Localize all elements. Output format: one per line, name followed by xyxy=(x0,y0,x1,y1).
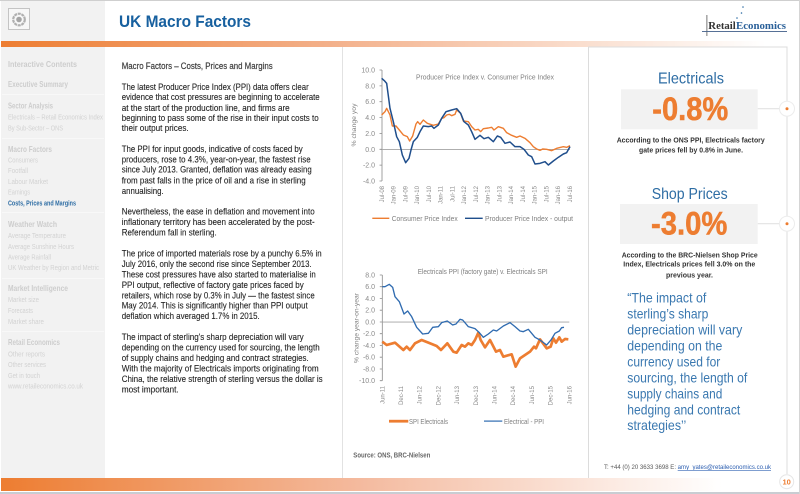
line chart: Electricals PPI v. Electricals SPI: Dec-11 xyxy=(399,385,405,405)
line chart: Producer Price Index v. Consumer Price Index: Jan-11 xyxy=(439,185,445,204)
page number: 10 xyxy=(783,478,791,486)
sidebar navigation: Market size xyxy=(8,297,39,304)
line chart: Electricals PPI v. Electricals SPI: Jun-16 xyxy=(567,385,573,404)
paragraph 1 xyxy=(122,82,320,133)
paragraph 3 xyxy=(122,207,315,238)
line chart: Electricals PPI v. Electricals SPI: Electrical - PPI xyxy=(504,419,544,426)
line chart: Electricals PPI v. Electricals SPI: Electricals PPI (factory gate) v. Electricals SPI xyxy=(418,269,548,276)
pull quote: hedging and contract xyxy=(627,401,740,417)
line chart: Electricals PPI v. Electricals SPI: Dec-13 xyxy=(474,385,480,405)
icon: settings target xyxy=(8,8,30,30)
sidebar navigation: Electricals – Retail Economics Index xyxy=(8,114,103,122)
paragraph 4: May 2014. This is significantly higher than PPI output xyxy=(122,301,308,311)
paragraph 4: deflation which averaged 1.7% in 2015. xyxy=(122,311,260,321)
stat: Shop Prices xyxy=(620,186,794,279)
paragraph 4: PPI output, reflective of factory gate prices faced by xyxy=(122,280,304,290)
paragraph 1: The latest Producer Price Index (PPI) data offers clear xyxy=(122,82,309,92)
line chart: Producer Price Index v. Consumer Price Index: 2.0 xyxy=(365,131,375,138)
pull quote: currency used for xyxy=(627,354,721,370)
stat: Electricals: -0.8% xyxy=(652,91,728,127)
line chart: Producer Price Index v. Consumer Price Index: Jan-12 xyxy=(462,185,468,204)
page number xyxy=(780,475,794,489)
pull quote xyxy=(627,290,747,433)
paragraph 2: producers, rose to 4.3%, year-on-year, the fastest rise xyxy=(122,154,311,164)
sidebar navigation: Get in touch xyxy=(8,373,40,380)
stat: Shop Prices: previous year. xyxy=(666,270,713,279)
line chart: Producer Price Index v. Consumer Price Index: Consumer Price Index xyxy=(392,216,458,223)
line chart: Producer Price Index v. Consumer Price Index: Jan-16 xyxy=(556,185,562,204)
stat: Electricals: Electricals xyxy=(658,70,724,88)
line chart: Producer Price Index v. Consumer Price Index: Jan-14 xyxy=(509,185,515,204)
line chart: Producer Price Index v. Consumer Price Index: 6.0 xyxy=(365,99,375,106)
pull quote: supply chains and xyxy=(627,385,722,401)
line chart: Electricals PPI v. Electricals SPI: % change year-on-year xyxy=(354,292,360,363)
sidebar navigation: Macro Factors xyxy=(8,144,52,154)
line chart: Electricals PPI v. Electricals SPI: Jun-13 xyxy=(455,385,461,404)
line chart: Producer Price Index v. Consumer Price Index: Jan-09 xyxy=(392,185,398,204)
line chart: Producer Price Index v. Consumer Price Index: Jul-10 xyxy=(427,185,433,202)
stat: Shop Prices: Shop Prices xyxy=(652,186,728,203)
line chart: Producer Price Index v. Consumer Price Index: % change yoy xyxy=(351,103,358,146)
line chart: Electricals PPI v. Electricals SPI: Jun-15 xyxy=(530,385,536,404)
contact details: T: +44 (0) 20 3633 3698 E: xyxy=(604,465,676,471)
paragraph 5: most important. xyxy=(122,384,179,394)
sidebar navigation: By Sub-Sector – ONS xyxy=(8,126,63,132)
paragraph 4: July 2016, only the second rise since September 2013. xyxy=(122,259,312,269)
paragraph 1: at the start of the production line, and firms are xyxy=(122,103,290,113)
line chart: Electricals PPI v. Electricals SPI: Dec-15 xyxy=(549,385,555,405)
bottom orange band xyxy=(1,478,776,491)
paragraph 5: The impact of sterling's sharp depreciation will vary xyxy=(122,332,304,342)
source note: Source: ONS, BRC-Nielsen xyxy=(353,453,430,460)
paragraph 4: retailers, which rose by 0.3% in July — the fastest since xyxy=(122,290,315,300)
line chart: Electricals PPI v. Electricals SPI: -8.0 xyxy=(363,366,375,374)
sidebar navigation: Consumers xyxy=(8,158,38,164)
line chart: Electricals PPI v. Electricals SPI: -4.0 xyxy=(363,343,375,350)
sidebar navigation: Retail Economics xyxy=(8,337,60,347)
line chart: Electricals PPI v. Electricals SPI: 0.0 xyxy=(365,320,375,326)
stat: Shop Prices: According to the BRC-Nielsen Shop Price xyxy=(622,250,758,259)
pull quote: sterling’s sharp xyxy=(627,306,708,322)
line chart: Electricals PPI v. Electricals SPI: 8.0 xyxy=(365,272,375,280)
line chart: Producer Price Index v. Consumer Price Index: Jul-08 xyxy=(380,185,386,202)
paragraph 1: their output prices. xyxy=(122,123,189,133)
line chart: Producer Price Index v. Consumer Price Index: Jan-15 xyxy=(533,185,539,204)
paragraph 4: The price of imported materials rose by a punchy 6.5% in xyxy=(122,249,322,259)
line chart: Electricals PPI v. Electricals SPI: Dec-14 xyxy=(511,385,517,405)
line chart: Producer Price Index v. Consumer Price Index: -4.0 xyxy=(363,178,375,186)
paragraph 3: Nevertheless, the ease in deflation and movement into xyxy=(122,207,315,217)
sidebar navigation: Average Sunshine Hours xyxy=(8,244,74,251)
sidebar navigation: Other reports xyxy=(8,352,45,358)
paragraph 2: The PPI for input goods, indicative of costs faced by xyxy=(122,144,303,154)
logo: Retail Economics: Retail xyxy=(708,21,736,32)
line chart: Electricals PPI v. Electricals SPI xyxy=(354,269,573,426)
sidebar navigation: Market Intelligence xyxy=(8,283,68,293)
section heading: Macro Factors – Costs, Prices and Margins xyxy=(122,61,273,71)
paragraph 3: Referendum fall in sterling. xyxy=(122,228,217,238)
sidebar navigation: Footfall xyxy=(8,168,28,175)
sidebar panel xyxy=(1,1,105,478)
line chart: Electricals PPI v. Electricals SPI: Dec-12 xyxy=(436,385,442,405)
pull quote: strategies’’ xyxy=(627,417,686,433)
title: UK Macro Factors xyxy=(119,12,251,31)
paragraph 2: from past falls in the price of oil and a rise in sterling xyxy=(122,176,306,186)
line chart: Producer Price Index v. Consumer Price Index: Producer Price Index v. Consumer Price Index xyxy=(416,74,554,81)
line chart: Producer Price Index v. Consumer Price Index: 10.0 xyxy=(361,68,375,74)
paragraph 5 xyxy=(122,332,323,394)
line chart: Producer Price Index v. Consumer Price Index: Jan-13 xyxy=(486,185,492,204)
line chart: Producer Price Index v. Consumer Price Index: Jul-13 xyxy=(498,185,504,202)
sidebar navigation: Weather Watch xyxy=(8,219,57,229)
line chart: Producer Price Index v. Consumer Price Index xyxy=(351,68,574,223)
line chart: Producer Price Index v. Consumer Price Index: Producer Price Index - output xyxy=(485,216,573,223)
line chart: Electricals PPI v. Electricals SPI: 2.0 xyxy=(365,308,375,315)
paragraph 3: inflationary territory has been accelerated by the post- xyxy=(122,217,315,227)
stat: Shop Prices: Index, Electricals prices fell 3.0% on the xyxy=(623,260,755,269)
pull quote: “The impact of xyxy=(627,290,706,306)
line chart: Producer Price Index v. Consumer Price Index: 4.0 xyxy=(365,115,375,122)
sidebar navigation: Costs, Prices and Margins xyxy=(8,200,76,208)
paragraph 5: depending on the currency used for sourcing, the length xyxy=(122,343,320,353)
logo: Retail Economics: Economics xyxy=(736,21,786,32)
line chart: Electricals PPI v. Electricals SPI: 6.0 xyxy=(365,284,375,291)
line chart: Electricals PPI v. Electricals SPI: -2.0 xyxy=(363,331,375,338)
line chart: Producer Price Index v. Consumer Price Index: Jul-11 xyxy=(450,185,456,202)
line chart: Producer Price Index v. Consumer Price Index: Jul-12 xyxy=(474,185,480,202)
panel: key figures xyxy=(588,47,794,478)
sidebar navigation: Sector Analysis xyxy=(8,100,53,110)
sidebar navigation xyxy=(2,59,104,390)
line chart: Producer Price Index v. Consumer Price Index: 8.0 xyxy=(365,83,375,90)
paragraph 5: With the majority of Electricals imports originating from xyxy=(122,364,319,374)
paragraph 4: These cost pressures have also started to materialise in xyxy=(122,270,316,280)
paragraph 2: since July 2013. Granted, deflation was already easing xyxy=(122,165,312,175)
sidebar navigation: Earnings xyxy=(8,190,30,196)
sidebar navigation: Other services xyxy=(8,362,46,369)
contact details xyxy=(604,465,772,471)
contact details: amy_yates@retaileconomics.co.uk xyxy=(678,465,772,471)
sidebar navigation: UK Weather by Region and Metric xyxy=(8,265,99,272)
stat: Shop Prices: -3.0% xyxy=(651,205,727,241)
pull quote: sourcing, the length of xyxy=(627,369,747,385)
line chart: Producer Price Index v. Consumer Price Index: Jul-09 xyxy=(404,185,410,202)
paragraph 4 xyxy=(122,249,322,321)
stat: Electricals: According to the ONS PPI, Electricals factory xyxy=(617,136,765,145)
line chart: Electricals PPI v. Electricals SPI: Jun-11 xyxy=(380,385,386,404)
sidebar navigation: Labour Market xyxy=(8,179,48,186)
sidebar navigation: Average Rainfall xyxy=(8,254,51,262)
paragraph 1: beginning to pass some of the rise in their input costs to xyxy=(122,113,319,123)
line chart: Electricals PPI v. Electricals SPI: -10.0 xyxy=(359,378,375,385)
line chart: Electricals PPI v. Electricals SPI: 4.0 xyxy=(365,296,375,303)
line chart: Producer Price Index v. Consumer Price Index: 0.0 xyxy=(365,147,375,154)
paragraph 1: evidence that cost pressures are beginning to accelerate xyxy=(122,92,320,102)
line chart: Producer Price Index v. Consumer Price Index: -2.0 xyxy=(363,163,375,170)
line chart: Electricals PPI v. Electricals SPI: -6.0 xyxy=(363,355,375,362)
line chart: Producer Price Index v. Consumer Price Index: Jan-10 xyxy=(415,185,421,204)
top orange band xyxy=(1,41,781,47)
sidebar navigation: Executive Summary xyxy=(8,79,68,89)
paragraph 2: annualising. xyxy=(122,186,164,196)
line chart: Electricals PPI v. Electricals SPI: SPI Electricals xyxy=(409,419,448,426)
body text column xyxy=(122,61,323,394)
paragraph 5: of supply chains and hedging and contract strategies. xyxy=(122,353,309,363)
line chart: Producer Price Index v. Consumer Price Index: Jul-15 xyxy=(544,185,550,202)
sidebar navigation: Interactive Contents xyxy=(8,59,77,69)
line chart: Producer Price Index v. Consumer Price Index: Jul-16 xyxy=(568,185,574,202)
sidebar navigation: Forecasts xyxy=(8,308,33,315)
pull quote: depending on the xyxy=(627,338,722,354)
line chart: Electricals PPI v. Electricals SPI: Jun-12 xyxy=(418,385,424,404)
line chart: Producer Price Index v. Consumer Price Index: Jul-14 xyxy=(521,185,527,202)
paragraph 5: China, the relative strength of sterling versus the dollar is xyxy=(122,374,323,384)
paragraph 2 xyxy=(122,144,312,196)
pull quote: depreciation will vary xyxy=(627,322,742,338)
sidebar navigation: www.retaileconomics.co.uk xyxy=(7,384,83,390)
line chart: Electricals PPI v. Electricals SPI: Jun-14 xyxy=(492,385,498,404)
sidebar navigation: Market share xyxy=(8,319,44,326)
sidebar navigation: Average Temperature xyxy=(8,233,66,240)
stat: Electricals xyxy=(617,70,794,154)
logo: Retail Economics xyxy=(702,6,787,36)
stat: Electricals: gate prices fell by 0.8% in June. xyxy=(639,145,743,154)
